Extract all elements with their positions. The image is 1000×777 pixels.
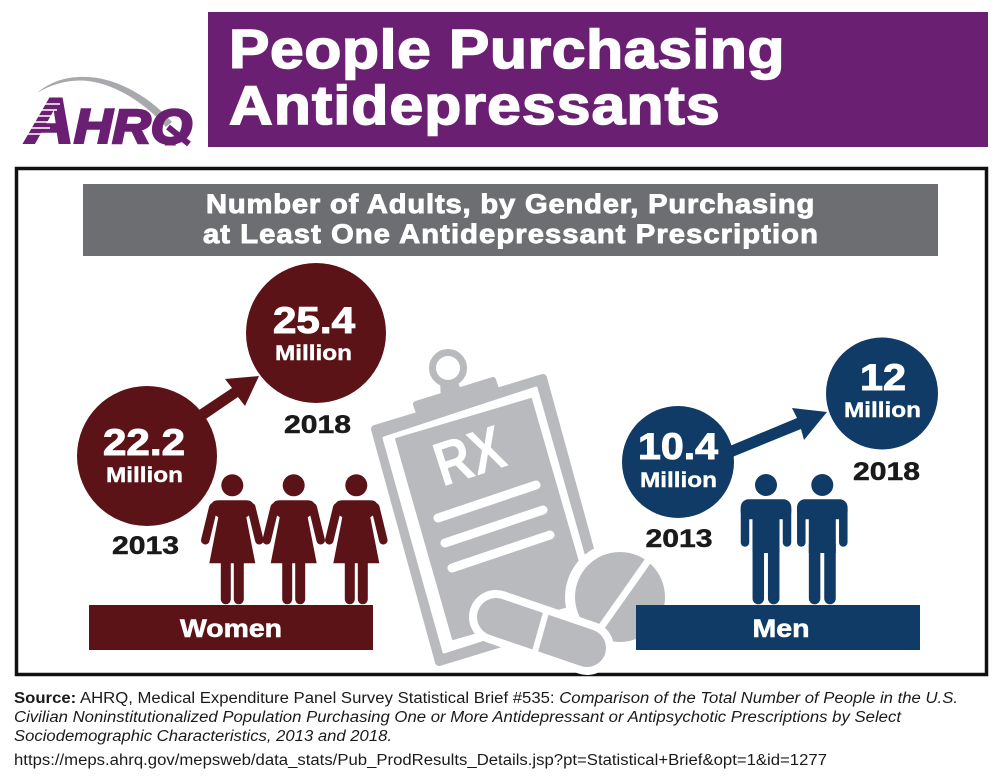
subtitle bar [83, 184, 938, 256]
circle: men 2018: Million [844, 399, 921, 422]
men label bar: Men [752, 615, 810, 643]
circle: women 2018: Million [275, 342, 352, 365]
circle: women 2018 [246, 263, 386, 403]
men label bar [636, 605, 920, 650]
year: women 2018: 2018 [284, 411, 351, 439]
icon: woman 3 [329, 474, 383, 599]
icon: woman 2 [267, 474, 321, 599]
circle: men 2018 [826, 338, 938, 450]
circle: men 2013: 10.4 [638, 426, 718, 467]
arrow: men increase [725, 408, 827, 460]
women label bar [89, 605, 373, 650]
year: men 2018: 2018 [853, 458, 920, 486]
title banner [208, 12, 988, 147]
AHRQ logo [24, 77, 200, 157]
circle: men 2018: 12 [860, 357, 906, 398]
title: People Purchasing [229, 19, 785, 80]
logo lettering [24, 85, 200, 157]
RX label: RX [426, 413, 513, 500]
year: men 2013: 2013 [646, 525, 712, 553]
subtitle text: at Least One Antidepressant Prescription [203, 219, 818, 249]
circle: women 2013 [77, 386, 217, 526]
source citation: Sociodemographic Characteristics, 2013 and 2018. [14, 728, 392, 745]
subtitle text [203, 189, 818, 249]
source citation [14, 690, 958, 769]
logo lettering: A [24, 85, 74, 157]
circle: women 2018: 25.4 [273, 300, 355, 341]
main panel frame [16, 168, 986, 674]
icon: man 2 [797, 474, 848, 598]
icon: capsule [496, 609, 587, 655]
logo lettering: HRQ [74, 101, 192, 154]
circle: men 2013 [622, 406, 734, 518]
subtitle text: Number of Adults, by Gender, Purchasing [206, 189, 814, 219]
circle: women 2013: Million [106, 464, 183, 487]
icon: round pill [565, 542, 675, 652]
title [229, 19, 784, 136]
source citation: https://meps.ahrq.gov/mepsweb/data_stats/Pub_ProdResults_Details.jsp?pt=Statistical+Brief&opt=1&id=1277 [14, 752, 827, 769]
men group [622, 338, 938, 650]
title: Antidepressants [229, 75, 720, 136]
logo arc [37, 77, 172, 127]
circle: women 2013: 22.2 [103, 422, 185, 463]
year: women 2013: 2013 [112, 532, 179, 560]
icon: man 1 [741, 474, 791, 598]
source citation: Civilian Noninstitutionalized Population Purchasing One or More Antidepressant or Antipsychotic Prescriptions by Select [14, 709, 902, 726]
icon: prescription clipboard [375, 352, 607, 662]
icon: woman 1 [205, 474, 259, 599]
circle: men 2013: Million [640, 469, 717, 492]
women label bar: Women [180, 615, 282, 643]
clipboard lines [438, 485, 550, 568]
source citation: Source: AHRQ, Medical Expenditure Panel Survey Statistical Brief #535: Comparison of the Total Number of People in the U.S. [14, 690, 958, 707]
arrow: women increase [193, 376, 259, 423]
women group [77, 263, 386, 650]
